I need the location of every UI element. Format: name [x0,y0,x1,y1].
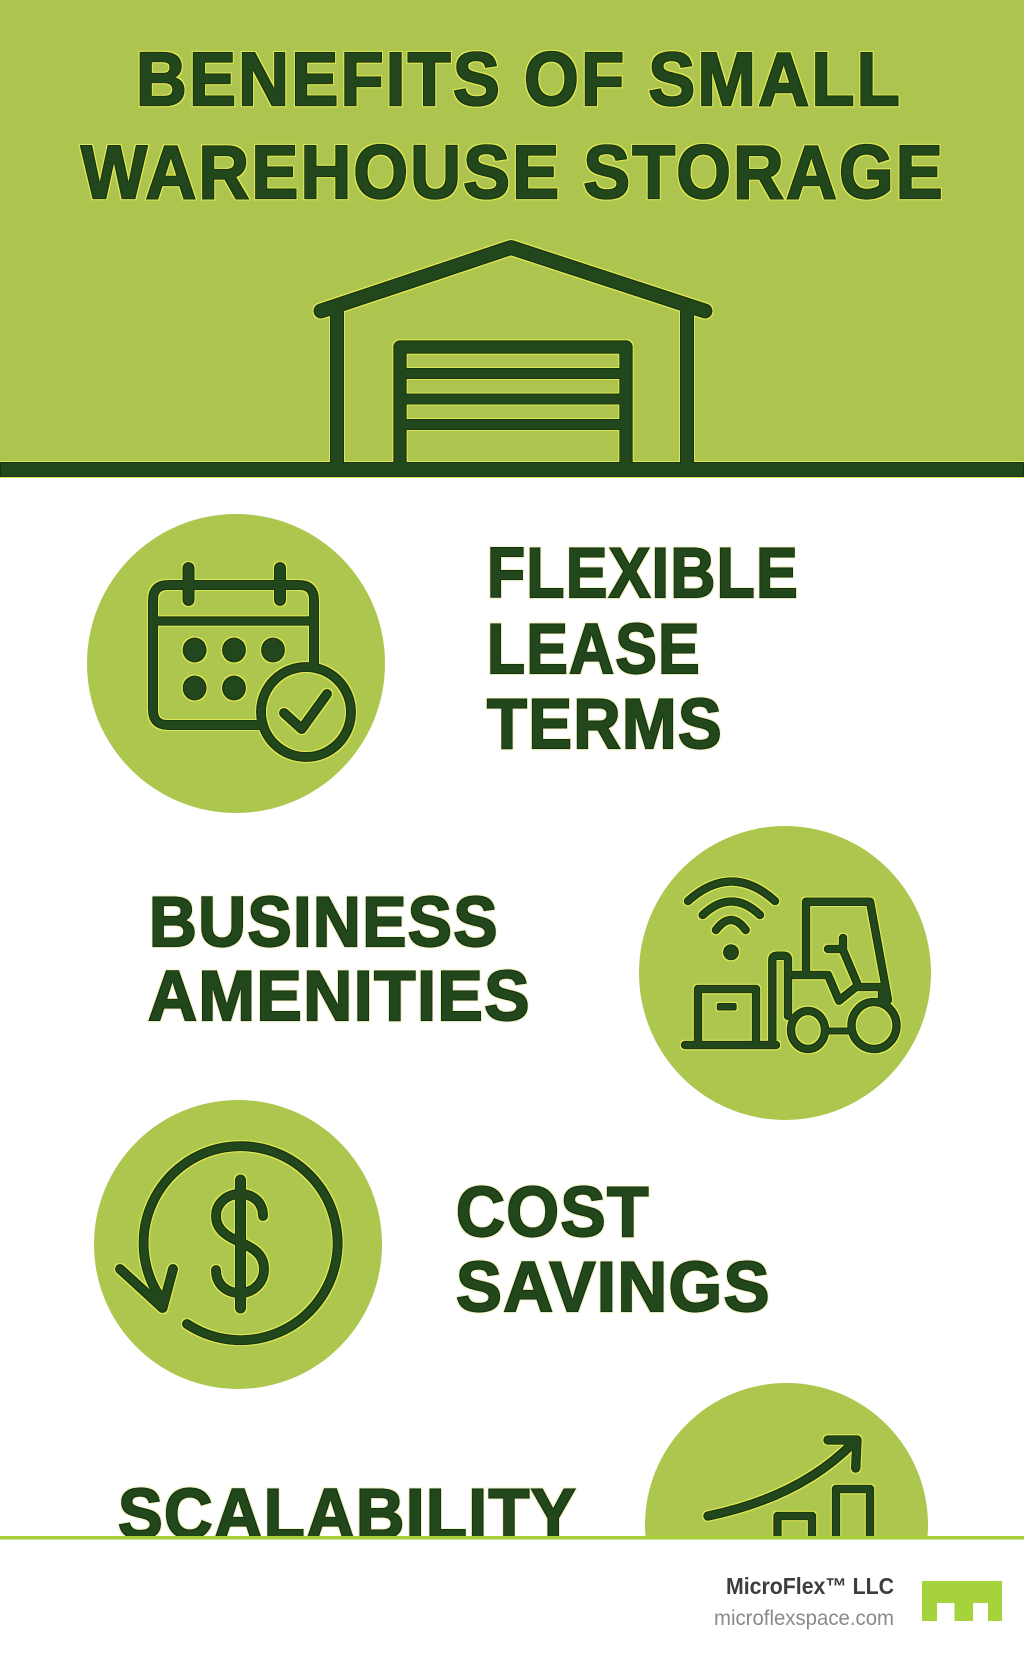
icon circle [639,826,931,1120]
icon: wifi and forklift [685,882,896,1049]
label: AMENITIES [148,956,531,1035]
icon circle [645,1383,928,1666]
panel: business amenities [148,826,931,1120]
label: LEASE [487,609,701,688]
title: WAREHOUSE STORAGE [81,130,945,214]
panel: scalability [118,1383,928,1666]
icon: dollar with circular arrow [120,1146,338,1340]
icon circle [94,1100,382,1389]
label: SCALABILITY [118,1474,577,1553]
label: SAVINGS [456,1247,771,1326]
label [487,533,799,763]
icon circle [87,514,385,813]
panel: cost savings [94,1100,771,1389]
panel: flexible lease terms [87,514,799,813]
title [81,37,945,214]
label: BUSINESS [149,882,499,961]
label: TERMS [487,684,723,763]
icon: growth arrow and bars [708,1440,870,1545]
label: FLEXIBLE [487,533,799,612]
footer [0,1536,1024,1666]
title: BENEFITS OF SMALL [136,37,902,121]
label: COST [456,1172,650,1251]
icon: calendar with check [153,568,351,757]
icon: logo [922,1581,1002,1621]
label [148,882,531,1035]
header band [0,0,1024,477]
label [456,1172,771,1326]
icon: warehouse with roller door [0,248,1024,470]
website: microflexspace.com [714,1607,894,1630]
company name: MicroFlex™ LLC [726,1573,894,1599]
